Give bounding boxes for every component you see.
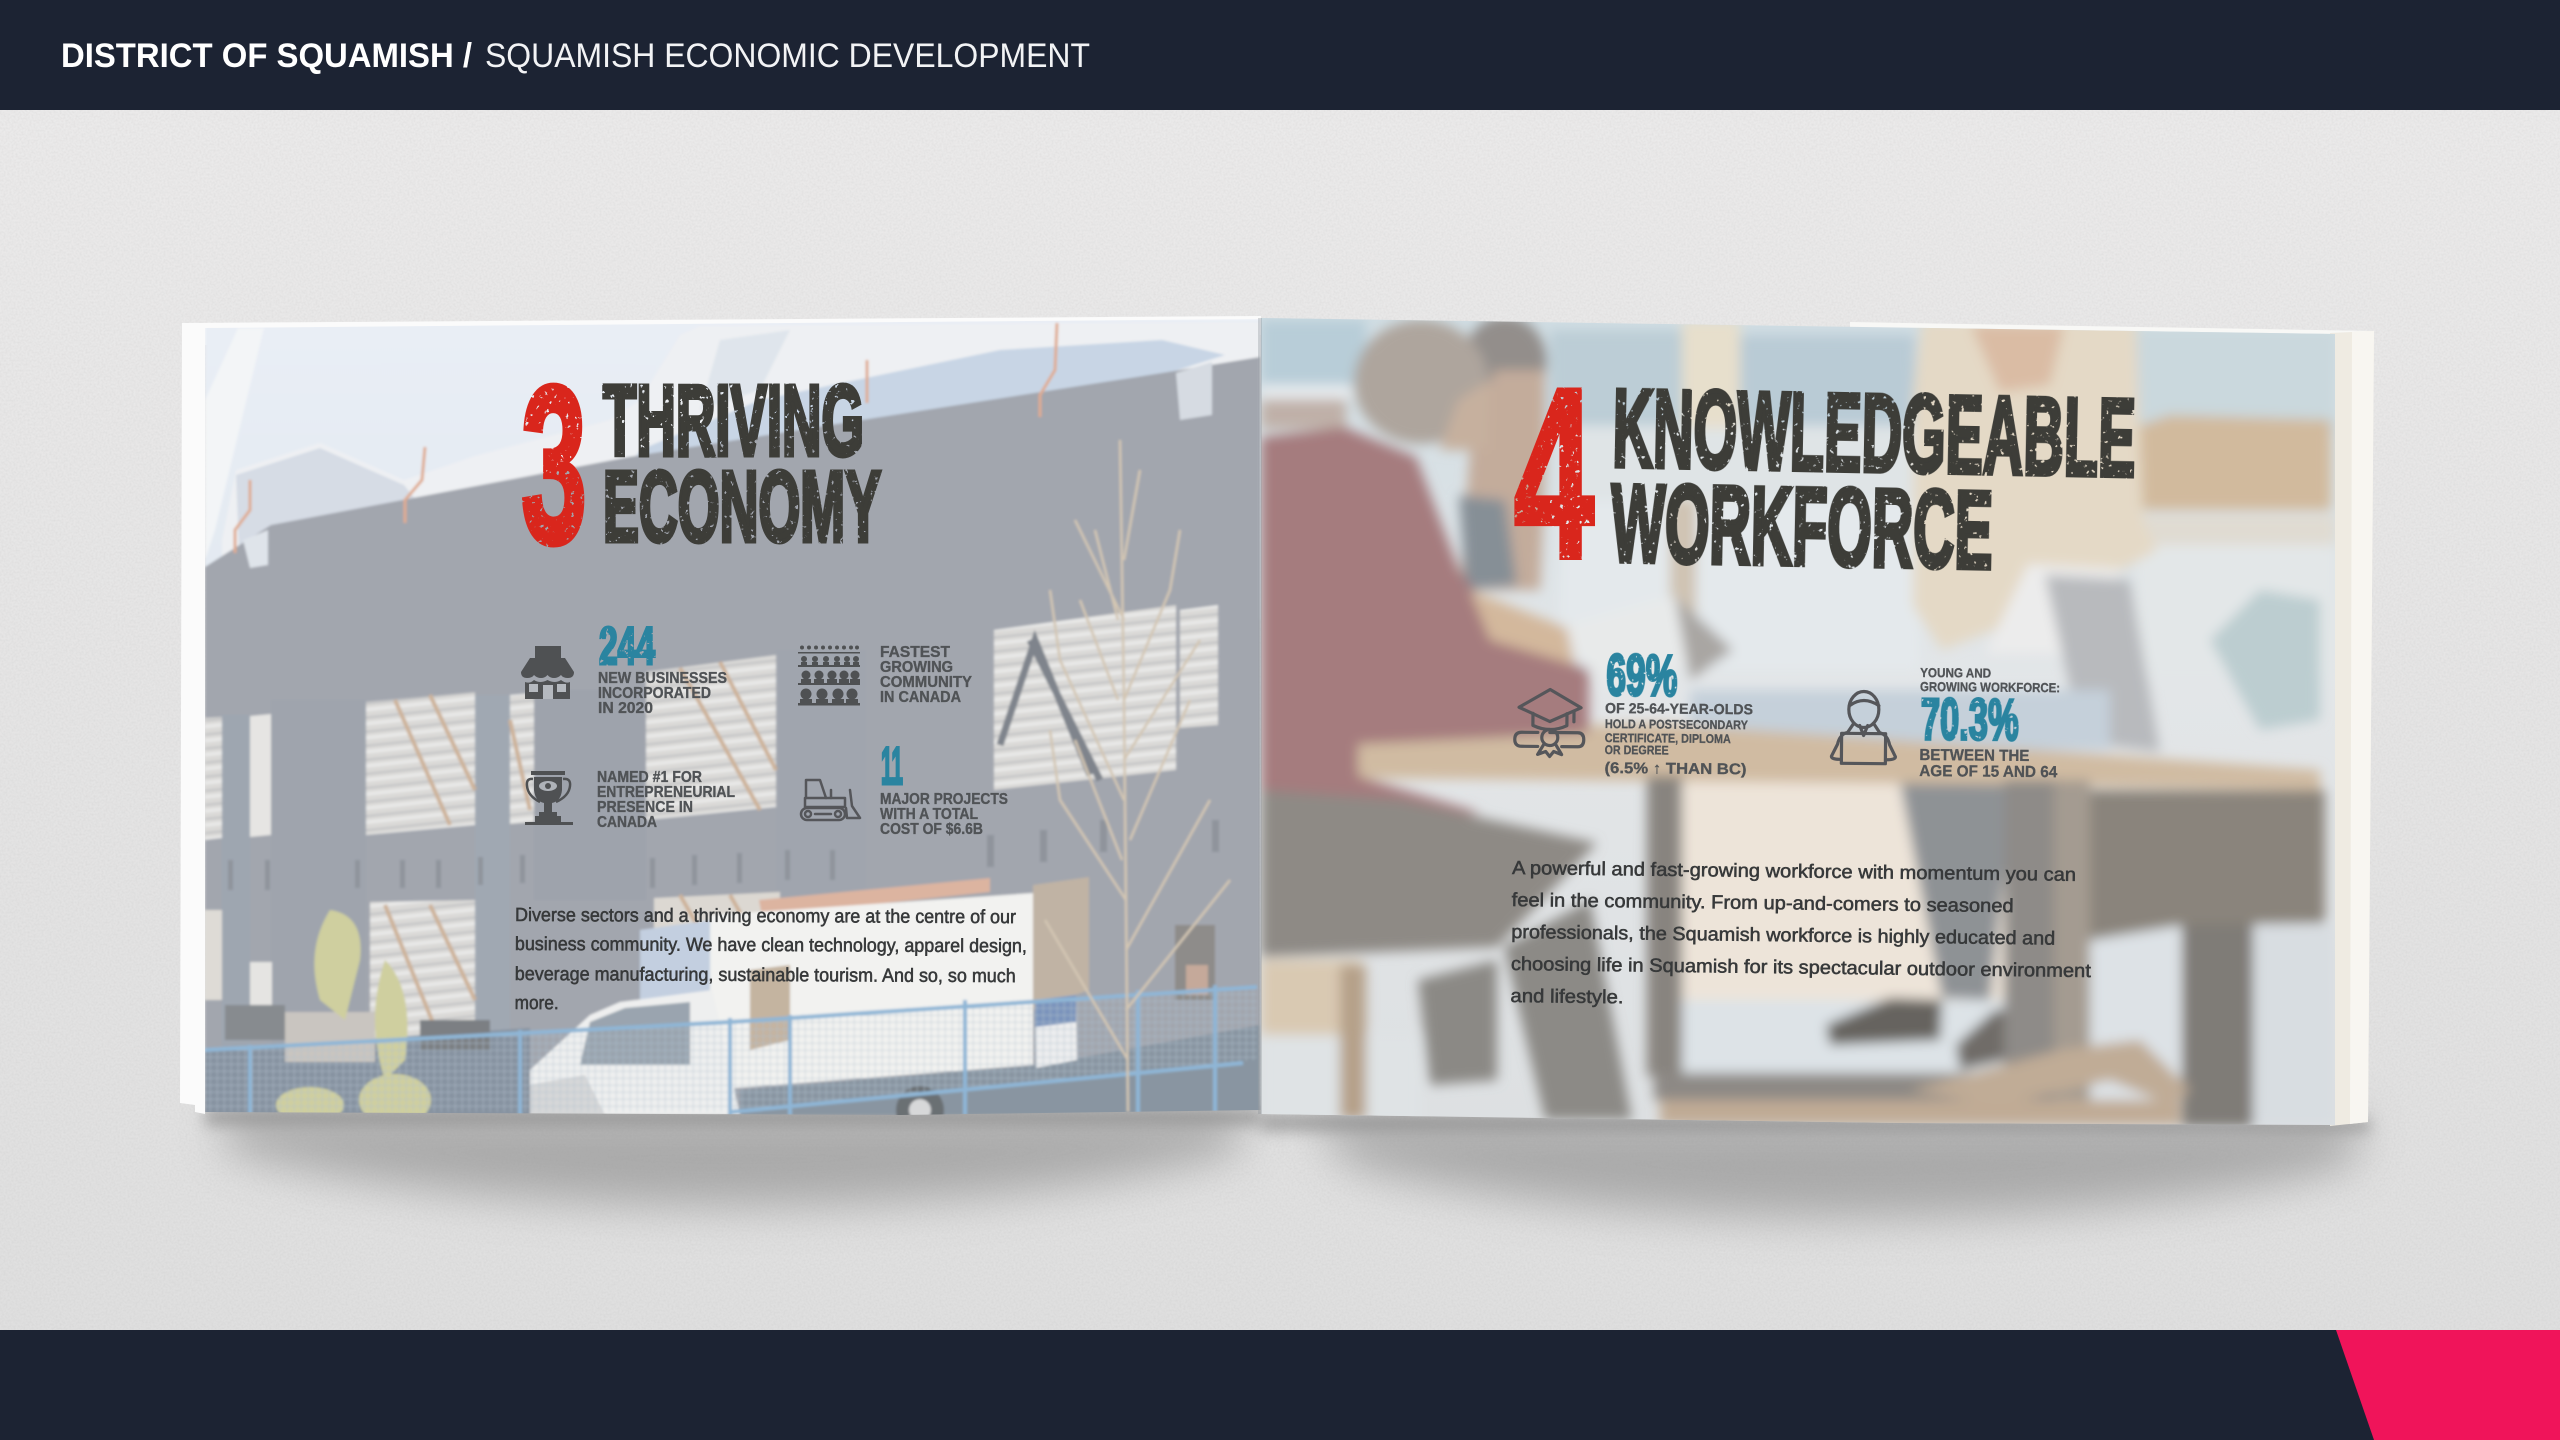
stat: 69 percent: CERTIFICATE, DIPLOMA xyxy=(1605,731,1731,746)
header bar xyxy=(0,0,2560,110)
panel: right page photo, blurred workplace xyxy=(1261,316,2341,1128)
blue table items xyxy=(1690,690,2110,750)
panel: section 3 thriving economy xyxy=(515,340,1027,1016)
equipment left xyxy=(225,1005,285,1040)
stat: 69 percent: OR DEGREE xyxy=(1605,743,1669,758)
lower windows xyxy=(205,910,222,1000)
arm / hand xyxy=(1470,590,1575,665)
book drop shadow xyxy=(205,1108,2370,1218)
floor xyxy=(1682,1000,2012,1075)
header title xyxy=(61,37,1090,75)
truck blue panel xyxy=(638,920,711,1000)
body text: diverse sectors xyxy=(515,905,1027,1016)
stat: 244 new businesses: NEW BUSINESSES xyxy=(598,670,727,687)
stat: 244 new businesses: INCORPORATED xyxy=(598,685,711,702)
stat: fastest growing community: GROWING xyxy=(880,659,953,676)
body text: diverse sectors: Diverse sectors and a thriving economy are at the centre of our xyxy=(515,905,1017,928)
shoes xyxy=(1826,998,1942,1045)
right person legs xyxy=(2090,790,2325,940)
orange truck roof rack xyxy=(759,878,990,916)
icon: storefront xyxy=(521,646,574,699)
table top xyxy=(1358,723,2320,790)
centre wall xyxy=(1682,776,2043,1006)
body text: diverse sectors: beverage manufacturing, sustainable tourism. And so, so much xyxy=(515,964,1016,987)
white truck box xyxy=(710,893,1033,1090)
top left window xyxy=(1261,320,1366,385)
bottom strip xyxy=(1660,1100,2180,1125)
stat: 244 new businesses: 244 xyxy=(599,617,655,676)
stat: 11 major projects: WITH A TOTAL xyxy=(880,806,978,823)
right cream page block xyxy=(2330,331,2374,1126)
stat: 70.3 percent xyxy=(1831,664,2060,781)
window frames xyxy=(1550,330,1682,425)
bare tree xyxy=(1045,440,1230,1112)
right stool xyxy=(1910,1040,2190,1105)
stat: 70.3 percent: AGE OF 15 AND 64 xyxy=(1919,763,2057,781)
laptop screen xyxy=(1985,564,2122,654)
hall bright middle xyxy=(1560,500,1920,670)
left white page edge xyxy=(180,316,1261,1114)
tablet xyxy=(1560,596,1733,690)
footer pink accent xyxy=(2336,1330,2560,1440)
stat: named number one: CANADA xyxy=(597,814,657,831)
right windows xyxy=(2136,330,2336,435)
upper windows xyxy=(205,717,222,840)
body text: diverse sectors: business community. We have clean technology, apparel design, xyxy=(515,934,1027,957)
stat: fastest growing community: COMMUNITY xyxy=(880,674,973,691)
ground / under fence xyxy=(740,1025,1260,1115)
body text: powerful workforce: feel in the community. From up-and-comers to seasoned xyxy=(1512,890,2014,917)
body text: powerful workforce: and lifestyle. xyxy=(1510,986,1624,1008)
columns xyxy=(222,715,250,1115)
heading number 4: 4 xyxy=(1514,339,1594,609)
body text: powerful workforce: A powerful and fast-growing workforce with momentum you can xyxy=(1512,858,2076,886)
stat: 70.3 percent: YOUNG AND xyxy=(1920,665,1991,681)
steel braces in windows xyxy=(395,662,776,825)
standing woman shirt xyxy=(1913,320,2157,650)
stat: 69 percent xyxy=(1514,642,1754,778)
stat: fastest growing community xyxy=(798,644,973,706)
stat: 11 major projects: 11 xyxy=(881,737,903,796)
icon: graduation cap and diploma xyxy=(1515,689,1584,757)
footer bar xyxy=(0,1330,2560,1440)
heading thriving economy xyxy=(603,365,881,563)
stat: 244 new businesses: IN 2020 xyxy=(598,700,653,717)
stat: 11 major projects xyxy=(801,737,1008,838)
stat: 11 major projects: COST OF $6.6B xyxy=(880,821,983,838)
stat: 69 percent: OF 25-64-YEAR-OLDS xyxy=(1605,701,1753,718)
book page edges xyxy=(180,316,2374,1126)
table legs xyxy=(1647,776,1682,1076)
body text: powerful workforce xyxy=(1510,858,2093,1014)
stat: named number one: PRESENCE IN xyxy=(597,799,693,816)
stat: 11 major projects: MAJOR PROJECTS xyxy=(880,791,1008,808)
stat: 69 percent: HOLD A POSTSECONDARY xyxy=(1605,717,1749,732)
body text: diverse sectors: more. xyxy=(515,993,559,1014)
stat: 70.3 percent: 70.3% xyxy=(1920,687,2019,753)
header title: SQUAMISH ECONOMIC DEVELOPMENT xyxy=(485,37,1090,75)
fence xyxy=(205,985,1257,1112)
mast xyxy=(205,328,264,560)
panel: section 4 knowledgeable workforce xyxy=(1510,339,2137,1014)
cap blocks xyxy=(243,530,268,568)
stat: fastest growing community: IN CANADA xyxy=(880,689,961,706)
body text: powerful workforce: choosing life in Squamish for its spectacular outdoor environment xyxy=(1511,954,2092,982)
hoodie man xyxy=(1261,427,1589,839)
stat: 69 percent: 69% xyxy=(1606,643,1678,709)
heading thriving economy: ECONOMY xyxy=(603,451,881,563)
stat: 70.3 percent: BETWEEN THE xyxy=(1919,747,2030,765)
head xyxy=(1354,320,1488,444)
stat: 69 percent: (6.5% ↑ THAN BC) xyxy=(1604,760,1747,778)
panel: left page photo, construction site xyxy=(205,319,1261,1134)
hooks xyxy=(235,323,1057,553)
stat: named number one: ENTREPRENEURIAL xyxy=(597,784,735,801)
stat: fastest growing community: FASTEST xyxy=(880,644,951,661)
concrete frame xyxy=(205,357,1260,1115)
heading thriving economy: THRIVING xyxy=(603,365,864,477)
stat: named number one: NAMED #1 FOR xyxy=(597,769,702,786)
notice sign xyxy=(1034,1016,1078,1070)
heading number 3: 3 xyxy=(521,340,587,590)
beam slots xyxy=(228,820,1219,890)
icon: person at laptop xyxy=(1831,691,1896,764)
spine crease xyxy=(1258,318,1262,1114)
trousers xyxy=(1261,790,1597,957)
sky xyxy=(205,319,1260,566)
snowy mountains xyxy=(223,454,629,554)
heading knowledgeable workforce: WORKFORCE xyxy=(1610,462,1994,592)
icon: rows of people xyxy=(798,646,860,706)
second man xyxy=(1463,316,1547,408)
stat: named number one xyxy=(525,769,735,831)
stat: 244 new businesses xyxy=(521,617,727,717)
body text: powerful workforce: professionals, the Squamish workforce is highly educated and xyxy=(1511,922,2055,950)
header title: DISTRICT OF SQUAMISH / xyxy=(61,37,473,75)
yellow-green tree xyxy=(276,910,431,1126)
heading knowledgeable workforce xyxy=(1610,367,2137,595)
right page top edge xyxy=(1850,322,2374,336)
icon: trophy xyxy=(525,771,573,825)
truck cab xyxy=(528,990,740,1115)
icon: bulldozer xyxy=(801,780,860,820)
laptop lid xyxy=(2045,575,2160,752)
standing woman legs xyxy=(1899,776,2014,1000)
stat: 70.3 percent: GROWING WORKFORCE: xyxy=(1920,679,2060,695)
